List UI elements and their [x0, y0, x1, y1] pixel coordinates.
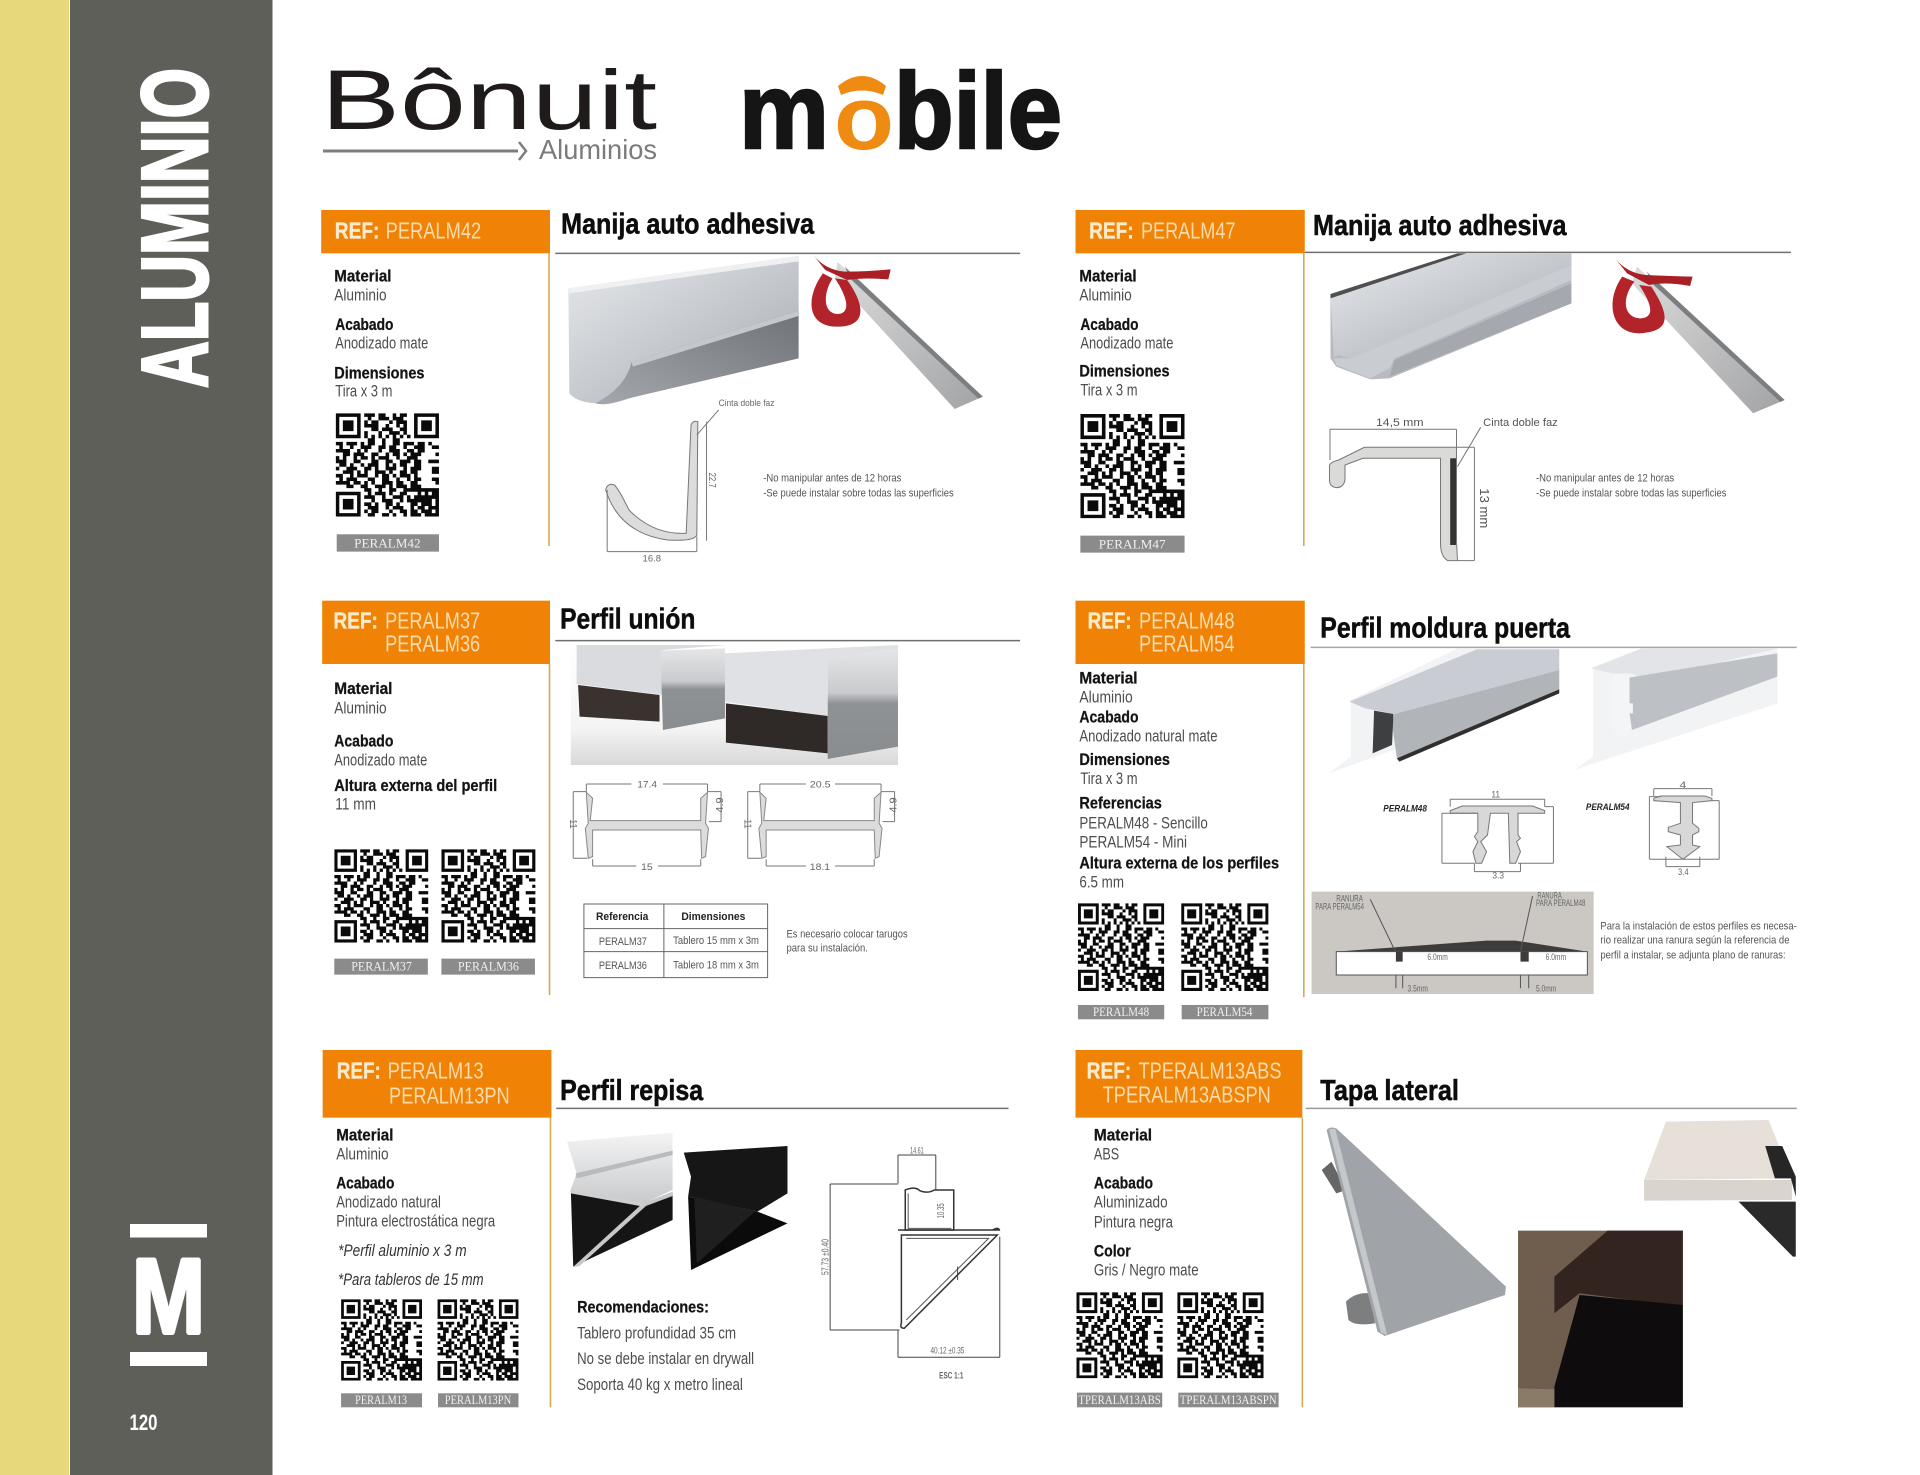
technical drawing: union sections: 11 — [568, 819, 579, 829]
technical drawing: union sections: 4.9 — [887, 797, 899, 813]
QR code — [336, 413, 439, 517]
reference banner: PERALM54 — [1139, 632, 1234, 657]
specifications: Referencias — [1079, 795, 1162, 812]
reference banner: PERALM13PN — [389, 1083, 510, 1109]
recommendations: Recomendaciones: — [577, 1299, 709, 1317]
technical drawing: handle section: 22.7 — [707, 473, 718, 488]
QR tags: PERALM36 — [458, 960, 519, 974]
reference banner — [321, 210, 550, 253]
logo: Bônuit Aluminios — [321, 53, 657, 165]
specifications: Tira x 3 m — [1080, 382, 1138, 400]
specifications: Acabado — [1080, 316, 1139, 334]
specifications — [1079, 670, 1279, 891]
specifications: Color — [1094, 1243, 1131, 1261]
reference banner — [1076, 210, 1305, 253]
technical drawing: shelf section: 40.12 ±0.35 — [930, 1345, 964, 1356]
reference banner: PERALM13 — [388, 1058, 484, 1084]
technical drawing: section PERALM54 — [1586, 780, 1719, 877]
reference banner — [1076, 601, 1305, 664]
technical drawing: union sections: 18.1 — [810, 862, 830, 872]
photo: door moulding single — [1329, 648, 1559, 773]
technical drawing: union sections: 17.4 — [637, 779, 658, 790]
logo: mobile: bile — [894, 50, 1062, 171]
installation note: para su instalación. — [787, 941, 868, 954]
reference banner: PERALM48 — [1139, 608, 1234, 634]
logo: mobile: o — [834, 69, 894, 169]
QR tags — [334, 959, 535, 975]
photo: shelf profile natural — [567, 1133, 673, 1267]
QR tags: PERALM37 — [351, 960, 412, 974]
QR tags: PERALM13 — [355, 1394, 407, 1407]
technical drawing: section PERALM48: 11 — [1491, 789, 1500, 800]
technical drawing: union sections — [568, 779, 899, 872]
installation notes: -Se puede instalar sobre todas las superficies — [763, 486, 954, 499]
groove plan: PARA PERALM48 — [1536, 898, 1585, 908]
technical drawing: handle section: 16.8 — [643, 554, 661, 564]
specifications: Altura externa del perfil — [334, 777, 497, 795]
technical drawing: section PERALM54: PERALM54 — [1586, 802, 1630, 812]
installation notes: -Se puede instalar sobre todas las superficies — [1536, 486, 1726, 499]
logo: mobile: m — [739, 50, 829, 171]
specifications: Material — [1079, 670, 1138, 687]
QR tag: PERALM47 — [1099, 538, 1166, 552]
specifications: Altura externa de los perfiles — [1079, 855, 1279, 872]
specifications: Material — [334, 268, 391, 286]
technical drawing: union sections: 11 — [742, 819, 754, 829]
QR code — [1080, 414, 1185, 518]
QR tags: PERALM13PN — [445, 1394, 512, 1407]
photo: door moulding mini — [1574, 648, 1777, 770]
grey sidebar — [70, 0, 272, 1475]
dimensions table: PERALM36 — [599, 959, 647, 971]
reference banner — [322, 601, 550, 664]
specifications — [334, 680, 497, 813]
specifications: Aluminio — [336, 1146, 389, 1163]
technical drawing: union sections: 15 — [641, 862, 653, 872]
installation notes: -No manipular antes de 12 horas — [763, 471, 901, 484]
specifications: 11 mm — [335, 796, 376, 813]
specifications: Aluminio — [334, 700, 387, 717]
specifications: Aluminio — [1079, 689, 1133, 707]
QR code — [334, 849, 428, 943]
QR tags: TPERALM13ABS — [1078, 1394, 1161, 1407]
technical drawing: shelf section — [819, 1145, 1000, 1381]
specifications: Pintura electrostática negra — [336, 1213, 496, 1231]
reference banner: REF: — [335, 218, 379, 244]
QR tag: PERALM42 — [354, 537, 421, 551]
installation note: Es necesario colocar tarugos — [787, 927, 908, 940]
specifications — [1079, 268, 1173, 400]
panel: TPERALM13ABS / TPERALM13ABSPN — [1076, 1050, 1797, 1407]
photo: union profiles — [571, 643, 898, 765]
reference banner: REF: — [337, 1058, 381, 1084]
panel title: Perfil repisa — [560, 1074, 704, 1106]
photo: shelf with cap — [1644, 1120, 1796, 1257]
specifications: Aluminio — [334, 287, 387, 305]
QR tags: TPERALM13ABSPN — [1180, 1394, 1277, 1407]
brand mark M: M — [132, 1236, 205, 1356]
dimensions table: Dimensiones — [681, 910, 745, 922]
recommendations: No se debe instalar en drywall — [577, 1350, 754, 1368]
QR code — [1177, 1292, 1264, 1378]
specifications — [334, 268, 428, 401]
reference banner — [323, 1050, 551, 1118]
QR code — [1181, 903, 1268, 991]
reference banner: PERALM36 — [385, 632, 480, 657]
specifications: Anodizado mate — [1080, 335, 1173, 353]
specifications: 6.5 mm — [1079, 874, 1124, 891]
specifications: *Para tableros de 15 mm — [338, 1271, 484, 1289]
specifications: Acabado — [1079, 709, 1139, 726]
specifications: Material — [1094, 1127, 1152, 1145]
reference banner: REF: — [1087, 1058, 1131, 1084]
logo: Bônuit Aluminios: Aluminios — [539, 134, 657, 165]
dimensions table — [584, 904, 768, 978]
groove plan: 5.0mm — [1536, 984, 1556, 994]
specifications — [1094, 1127, 1199, 1279]
technical drawing: handle section: 14,5 mm — [1376, 416, 1424, 428]
specifications: Acabado — [335, 316, 393, 334]
photo: handle with adhesive tape — [1612, 258, 1785, 413]
installation note — [787, 927, 908, 954]
QR tags — [1078, 1005, 1268, 1019]
QR tags: PERALM54 — [1197, 1006, 1252, 1019]
QR tags — [341, 1393, 518, 1407]
technical drawing: shelf section: 10.35 — [935, 1203, 946, 1218]
reference banner: PERALM47 — [1141, 218, 1235, 244]
groove plan: RANURA — [1336, 894, 1363, 904]
reference banner: TPERALM13ABS — [1139, 1058, 1282, 1084]
groove plan: RANURA — [1537, 890, 1562, 901]
page number: 120 — [130, 1410, 158, 1435]
logo: Bônuit Aluminios: Bônuit — [321, 53, 657, 147]
specifications: Gris / Negro mate — [1094, 1262, 1199, 1279]
dimensions table: Tablero 15 mm x 3m — [673, 934, 759, 946]
dimensions table: Referencia — [596, 910, 648, 922]
reference banner: REF: — [1088, 608, 1132, 634]
panel title: Perfil unión — [560, 602, 695, 635]
QR code — [341, 1299, 422, 1381]
groove plan: 3.5mm — [1408, 984, 1428, 994]
specifications: Material — [334, 680, 392, 698]
reference banner: PERALM42 — [386, 218, 481, 244]
specifications: Pintura negra — [1094, 1214, 1173, 1231]
QR code — [438, 1299, 518, 1381]
specifications: Aluminizado — [1094, 1194, 1168, 1212]
QR code — [1076, 1292, 1163, 1378]
panel title: Manija auto adhesiva — [561, 207, 815, 240]
specifications: Tira x 3 m — [1080, 770, 1138, 788]
installation notes — [763, 471, 954, 499]
technical drawing: handle section: 13 mm — [1476, 488, 1490, 528]
technical drawing: handle section: Cinta doble faz — [1483, 416, 1558, 428]
technical drawing: section PERALM54: 4 — [1679, 780, 1687, 790]
specifications: Dimensiones — [334, 365, 424, 382]
QR tags: PERALM48 — [1093, 1006, 1149, 1019]
technical drawing: union sections: 20.5 — [810, 779, 831, 790]
specifications: ABS — [1094, 1146, 1119, 1163]
groove plan: 6.0mm — [1427, 952, 1448, 962]
photo: dark installed cap — [1518, 1231, 1683, 1407]
reference banner — [1076, 1050, 1302, 1118]
technical drawing: handle section: Cinta doble faz — [719, 398, 775, 408]
photo: handle profile — [568, 256, 799, 404]
specifications: *Perfil aluminio x 3 m — [338, 1242, 467, 1260]
specifications: Tira x 3 m — [335, 383, 392, 401]
specifications: Acabado — [334, 733, 393, 751]
specifications — [336, 1127, 496, 1289]
yellow side band — [0, 0, 69, 1475]
specifications: PERALM48 - Sencillo — [1079, 815, 1208, 832]
installation notes — [1536, 471, 1726, 499]
specifications: Anodizado natural — [336, 1194, 441, 1212]
technical drawing: union sections: 4.9 — [714, 797, 725, 813]
recommendations — [577, 1299, 754, 1394]
installation note — [1600, 919, 1797, 961]
panel: PERALM48 / PERALM54 — [1076, 601, 1797, 1019]
reference banner: TPERALM13ABSPN — [1103, 1082, 1271, 1108]
technical drawing: section PERALM48 — [1383, 789, 1553, 881]
photo: handle profile — [1330, 253, 1571, 379]
QR code — [441, 849, 535, 943]
technical drawing: handle section — [606, 398, 775, 564]
specifications: Anodizado mate — [335, 335, 428, 353]
specifications: Anodizado natural mate — [1079, 728, 1218, 746]
panel: PERALM13 / PERALM13PN — [323, 1050, 1009, 1407]
groove plan — [1312, 890, 1594, 994]
QR tags — [1077, 1393, 1279, 1407]
panel: PERALM37 / PERALM36 — [322, 601, 1020, 995]
specifications: PERALM54 - Mini — [1079, 834, 1187, 851]
dimensions table: PERALM37 — [599, 935, 647, 947]
recommendations: Soporta 40 kg x metro lineal — [577, 1376, 743, 1394]
specifications: Acabado — [1094, 1175, 1153, 1192]
photo: grey side cap — [1322, 1127, 1506, 1336]
panel title: Manija auto adhesiva — [1313, 209, 1567, 241]
specifications: Anodizado mate — [334, 752, 427, 769]
installation notes: -No manipular antes de 12 horas — [1536, 471, 1674, 484]
specifications: Acabado — [336, 1175, 394, 1192]
technical drawing: section PERALM48: PERALM48 — [1383, 804, 1427, 814]
recommendations: Tablero profundidad 35 cm — [577, 1325, 736, 1342]
technical drawing: shelf section: 14.61 — [910, 1145, 924, 1156]
reference banner: REF: — [1089, 218, 1134, 244]
technical drawing: handle section — [1329, 416, 1558, 561]
QR tag — [337, 534, 439, 552]
reference banner: REF: — [333, 608, 378, 634]
technical drawing: section PERALM54: 3.4 — [1678, 867, 1689, 877]
specifications: Aluminio — [1079, 287, 1132, 305]
QR code — [1078, 903, 1164, 991]
photo: shelf profile black — [684, 1146, 787, 1270]
panel title: Perfil moldura puerta — [1320, 611, 1571, 644]
panel title: Tapa lateral — [1320, 1074, 1459, 1106]
groove plan: PARA PERALM54 — [1315, 901, 1364, 912]
panel: PERALM47 — [1076, 209, 1791, 561]
technical drawing: shelf section: ESC 1:1 — [939, 1370, 964, 1381]
specifications: Dimensiones — [1079, 363, 1170, 381]
photo: handle with adhesive tape — [812, 255, 983, 409]
installation note: perfil a instalar, se adjunta plano de ranuras: — [1600, 948, 1786, 961]
installation note: rio realizar una ranura según la referencia de — [1600, 933, 1790, 946]
logo: mobile — [739, 50, 1062, 171]
QR tag — [1080, 536, 1185, 553]
technical drawing: shelf section: 57.73 ±0.40 — [819, 1239, 831, 1275]
panel: PERALM42 — [321, 207, 1020, 564]
technical drawing: section PERALM48: 3.3 — [1492, 870, 1504, 881]
reference banner: PERALM37 — [385, 608, 480, 634]
specifications: Material — [336, 1127, 393, 1145]
groove plan: 6.0mm — [1546, 952, 1566, 962]
dimensions table: Tablero 18 mm x 3m — [673, 958, 759, 971]
specifications: Material — [1079, 268, 1137, 286]
specifications: Dimensiones — [1079, 751, 1170, 769]
